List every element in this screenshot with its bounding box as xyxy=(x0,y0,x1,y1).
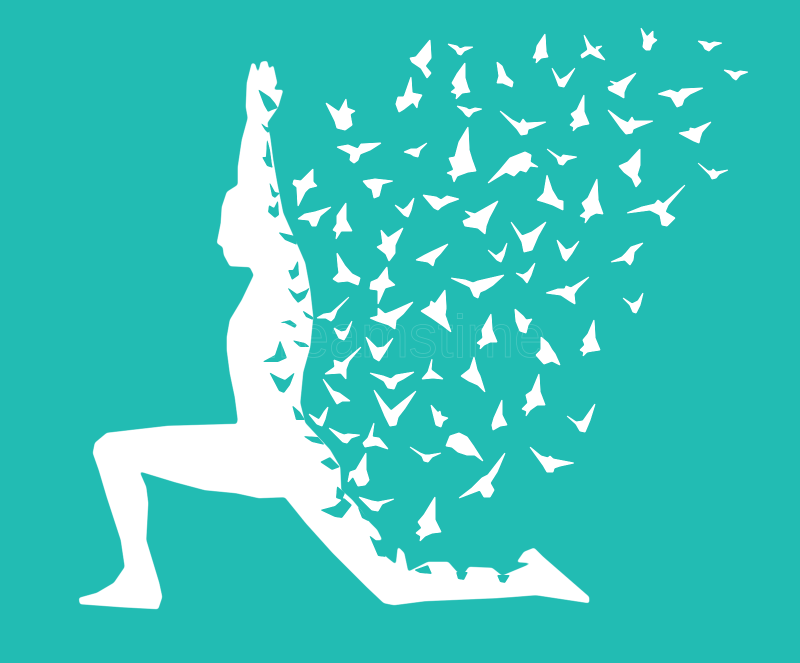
flock of white birds xyxy=(293,28,748,541)
watermark text: dreamstime xyxy=(246,303,546,370)
yoga figure silhouette xyxy=(79,61,589,609)
teal bird cut-outs in the figure xyxy=(258,89,510,583)
